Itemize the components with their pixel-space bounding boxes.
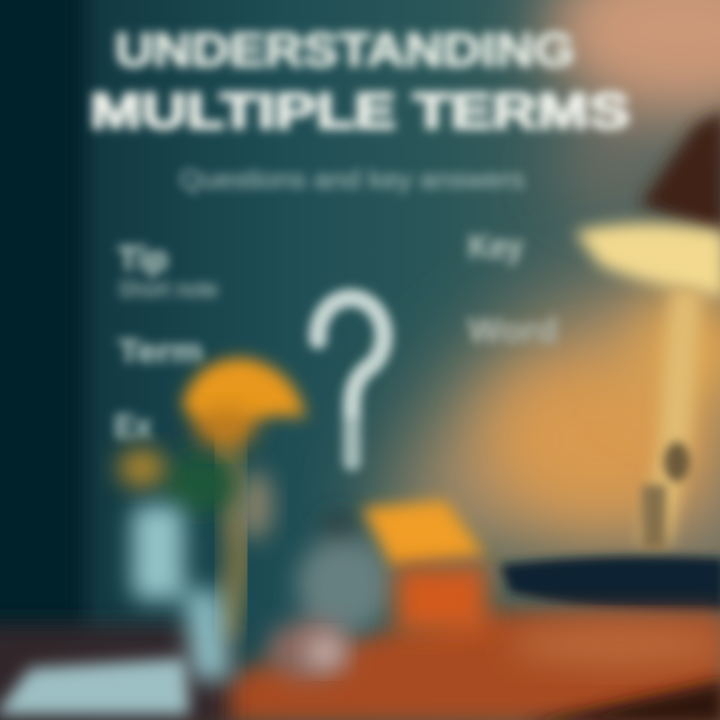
top right peach glow	[545, 0, 720, 205]
blossom core	[195, 408, 255, 448]
left item one	[118, 240, 218, 302]
box front	[395, 566, 487, 632]
left text blocks	[114, 240, 218, 446]
right stem haze	[237, 470, 273, 540]
orange box	[362, 500, 487, 632]
title: line one: UNDERSTANDING	[115, 23, 575, 76]
lamp bright rim	[575, 224, 720, 296]
icon: question mark	[318, 298, 384, 462]
table highlight	[510, 623, 720, 667]
title: line two: MULTIPLE TERMS	[90, 83, 630, 139]
vase	[132, 505, 232, 680]
blossom	[182, 358, 306, 432]
glass jar	[268, 514, 393, 680]
left item two: Term	[118, 333, 203, 369]
left item one: Tip	[118, 240, 168, 278]
lamp lower stem	[642, 485, 666, 550]
paper on table	[0, 658, 190, 715]
small orange bud	[118, 448, 166, 488]
left item one: Short note	[118, 276, 218, 302]
right item two: Word	[468, 312, 558, 350]
subtitle: Questions and key answers	[180, 164, 524, 194]
warm orange lamp glow	[380, 265, 720, 560]
table left shadow	[0, 625, 230, 720]
lamp base	[500, 556, 720, 613]
lamp stem knot	[664, 442, 690, 482]
stem	[222, 430, 240, 640]
lamp	[500, 110, 720, 613]
wooden table	[0, 612, 720, 720]
leaves	[164, 454, 236, 514]
box top	[362, 500, 485, 566]
lamp stem	[640, 290, 702, 545]
footer highlight	[307, 636, 343, 668]
lamp dark shade	[640, 110, 720, 235]
flower	[118, 358, 306, 640]
right text blocks	[468, 228, 558, 350]
left item three: Ex	[114, 408, 152, 446]
right item one: Key	[468, 228, 523, 266]
dark left band	[0, 0, 78, 630]
table front dark edge	[520, 680, 720, 720]
